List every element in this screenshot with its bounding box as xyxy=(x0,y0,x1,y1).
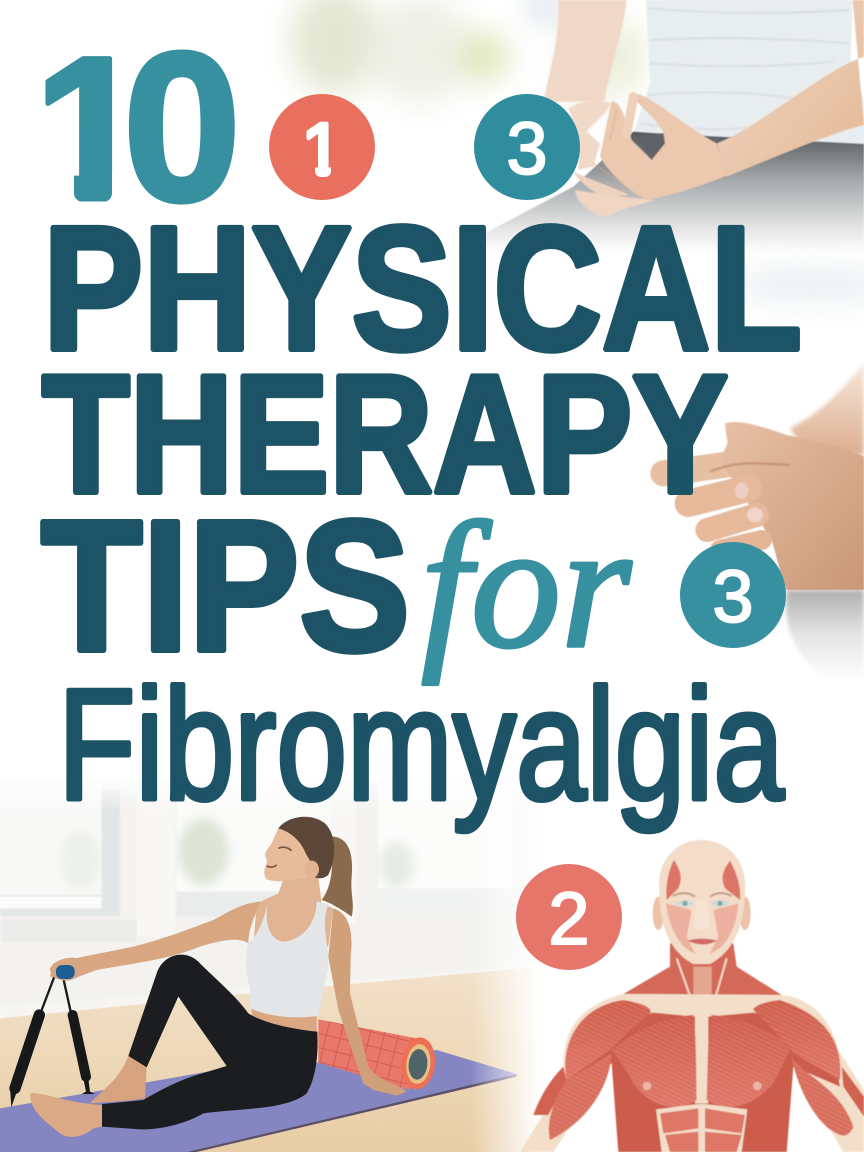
abs xyxy=(660,1108,698,1133)
pale band right of title xyxy=(730,265,864,305)
lap xyxy=(447,132,864,253)
tank top xyxy=(246,901,329,1017)
back arm xyxy=(328,908,407,1096)
anatomy figure xyxy=(520,840,864,1152)
back hand xyxy=(663,460,760,473)
photo: woman stretching on mat xyxy=(0,780,540,1152)
badge: 2 xyxy=(516,864,622,970)
badge: 1: 1 xyxy=(301,108,343,191)
neck and traps xyxy=(623,943,782,995)
extended arm xyxy=(50,902,260,980)
right arm xyxy=(717,0,864,177)
face xyxy=(264,823,317,881)
fingers xyxy=(688,488,748,503)
neck centre xyxy=(677,958,727,1005)
hair xyxy=(278,817,334,878)
body base xyxy=(520,994,864,1152)
blue grip xyxy=(56,965,75,979)
badge: 3 right: 3 xyxy=(712,555,754,638)
chest underlay xyxy=(567,1013,840,1152)
badge: 3 right xyxy=(680,542,786,648)
arms xyxy=(533,1067,567,1115)
badge: 2: 2 xyxy=(548,877,590,960)
foam roller xyxy=(318,1019,438,1091)
near foot xyxy=(30,1093,102,1137)
left forearm xyxy=(543,0,627,102)
photo background: blurred window xyxy=(290,0,639,120)
main hand xyxy=(720,422,864,590)
wrist xyxy=(790,363,864,455)
pectorals xyxy=(612,1015,697,1107)
badge: 3 top xyxy=(474,94,580,200)
torso skin xyxy=(250,1003,317,1033)
heading: THERAPY: THERAPY xyxy=(42,340,728,528)
title number: 10 xyxy=(45,50,235,205)
room background xyxy=(0,780,540,1020)
ponytail xyxy=(322,837,353,917)
tank top xyxy=(634,0,864,144)
wood floor xyxy=(0,967,540,1152)
hands xyxy=(568,94,728,217)
neck, shoulders and chest xyxy=(253,870,333,947)
head xyxy=(653,840,751,964)
photo: meditating woman's hands xyxy=(447,0,864,253)
resistance band tool xyxy=(10,975,95,1107)
leggings xyxy=(102,955,318,1129)
ear xyxy=(304,861,319,878)
title number: 10: 0 xyxy=(123,8,241,245)
badge: 3 top: 3 xyxy=(506,107,548,190)
abs backing xyxy=(656,1104,747,1152)
far foot xyxy=(90,1056,147,1103)
heading: TIPS: TIPS xyxy=(41,483,410,690)
deltoids xyxy=(565,1000,651,1080)
purple mat xyxy=(0,1050,517,1152)
textured mat xyxy=(786,590,864,680)
heading: for: for xyxy=(421,486,632,685)
fade right of room photo xyxy=(470,770,540,1152)
title number: 10: 1 xyxy=(34,15,147,243)
badge: 1 xyxy=(269,94,375,200)
photo: clasped hands xyxy=(663,363,864,680)
fade over top of room photo xyxy=(0,770,540,812)
